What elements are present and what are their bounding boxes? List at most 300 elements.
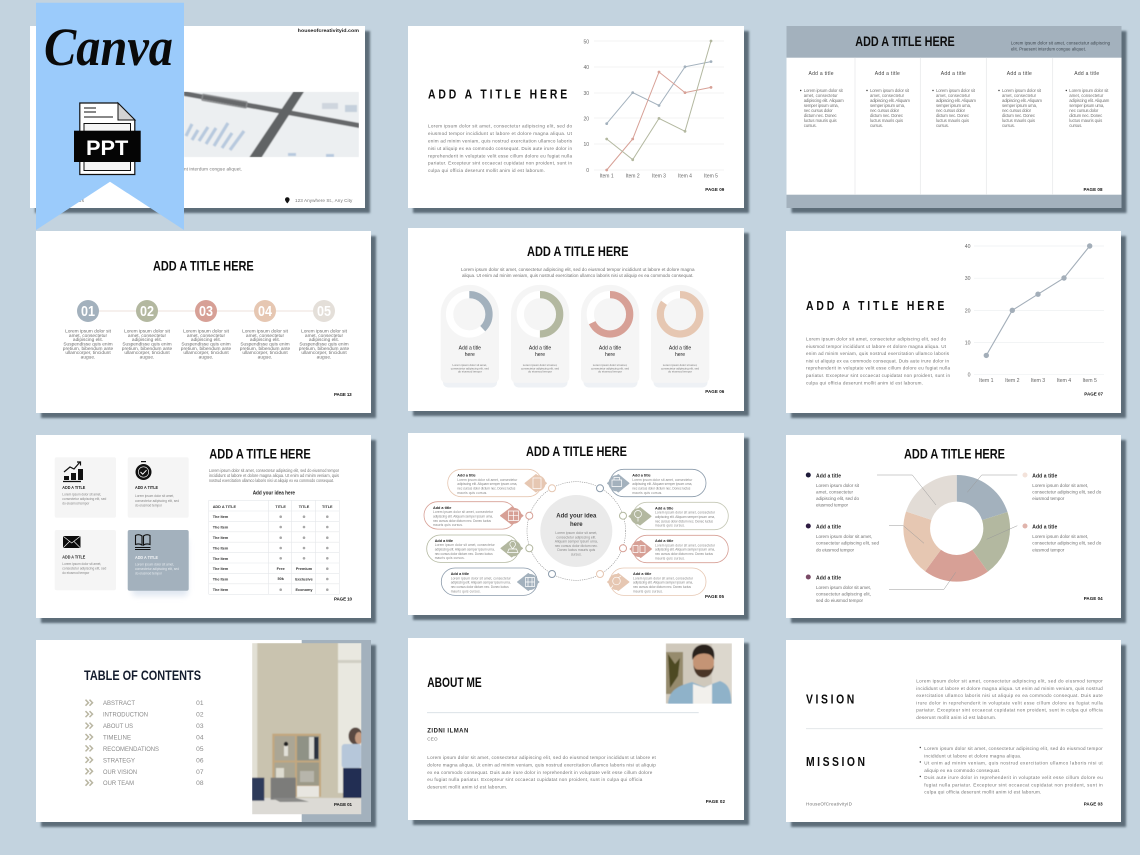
column 1 — [800, 71, 844, 128]
step 03: Suspendisse quis enim — [181, 342, 231, 348]
intro text: Lorem ipsum dolor sit amet, consectetur adipiscing elit, sed do eiusmod tempor — [209, 468, 339, 473]
line chart: 0 — [968, 372, 971, 378]
step 02: adipiscing elit. — [132, 337, 162, 343]
card: stopwatch: Lorem ipsum dolor sit amet, — [135, 494, 174, 498]
column 1: dictum nec. Donec — [804, 113, 838, 118]
column 4: amet, consectetur — [1002, 93, 1037, 98]
step 05: Lorem ipsum dolor sit — [301, 328, 348, 334]
legend: left 1 — [806, 472, 860, 508]
column 1: Add a title — [808, 71, 834, 77]
column 5: Lorem ipsum dolor sit — [1069, 88, 1109, 93]
item: left 4: Add a title — [451, 572, 469, 576]
biography: dolore magna aliqua. Ut enim ad minim veniam, quis nostrud exercitation ullamco laboris nisi ut aliquip — [427, 762, 656, 768]
column 3: adipiscing elit. Aliquam — [936, 98, 976, 103]
item: left 2: nec cursus dolor dictum nec. Donec luctus — [433, 519, 491, 523]
item: left 4: Lorem ipsum dolor sit amet, consectetur — [451, 576, 512, 580]
card 1: do eiusmod tempor — [458, 370, 482, 374]
comparison table — [209, 500, 339, 594]
item: right 1 — [608, 469, 706, 497]
column 3: Lorem ipsum dolor sit — [936, 88, 976, 93]
item: right 4: nec cursus dolor dictum nec. Donec luctus — [633, 585, 691, 589]
card: mail: do eiusmod tempor — [62, 571, 90, 575]
card: growth chart: Lorem ipsum dolor sit amet, — [62, 492, 101, 496]
line chart — [965, 243, 1104, 384]
leader lines — [877, 475, 1017, 589]
contents list: RECOMENDATIONS — [103, 746, 160, 753]
line chart: Item 3 — [652, 174, 666, 180]
ring nodes — [526, 485, 626, 578]
biography: eu fugiat nulla pariatur. Excepteur sint occaecat cupidatat non proident, sunt in culpa qui officia — [427, 777, 643, 782]
legend: left 1: amet, consectetur — [816, 490, 853, 494]
line chart: Item 5 — [1082, 378, 1097, 384]
comparison table: The Item — [213, 557, 229, 561]
page number: PAGE 01 — [334, 802, 352, 807]
card 1: Add a title — [459, 346, 481, 352]
comparison table: The Item — [213, 567, 229, 571]
step 05: Suspendisse quis enim — [299, 342, 349, 348]
legend: right 2: Add a title — [1032, 524, 1058, 530]
page number: PAGE 03 — [1084, 802, 1103, 806]
step 01 — [63, 300, 114, 360]
central hub: Donec luctus mauris quis — [557, 548, 596, 552]
step 03: 03 — [199, 304, 213, 320]
item: left 2: adipiscing elit. Aliquam semper ipsum urna, — [433, 514, 493, 518]
vision text: exercitation ullamco laboris nisi ut aliquip ex ea commodo consequat. Duis aute — [916, 693, 1103, 698]
biography: ex ea commodo consequat. Duis aute irure dolor in reprehenderit in voluptate velit esse cillum dolore — [427, 770, 653, 775]
biography: Lorem ipsum dolor sit amet, consectetur adipiscing elit, sed do eiusmod tempor incididunt ut labore et — [427, 755, 657, 760]
legend: right 1: consectetur adipiscing elit, sed do — [1032, 490, 1102, 494]
step 01: pretium, bibendum ante — [63, 346, 114, 352]
card 4: here — [675, 352, 685, 358]
column 4: semper ipsum urna, — [1002, 103, 1037, 108]
comparison table: The Item — [213, 526, 229, 530]
comparison table: 50k — [278, 577, 285, 581]
column 4: Lorem ipsum dolor sit — [1002, 88, 1042, 93]
item: right 3: Lorem ipsum dolor sit amet, consectetur — [655, 543, 716, 547]
step 02: pretium, bibendum ante — [122, 346, 173, 352]
line chart: Item 2 — [1005, 378, 1020, 384]
column 3: dictum nec. Donec — [936, 113, 970, 118]
line chart: Item 4 — [678, 174, 692, 180]
column 1: cursus. — [804, 123, 817, 128]
legend: left 1: Add a title — [816, 473, 841, 479]
card 2: consectetur adipiscing elit, sed — [521, 366, 559, 370]
mission list — [920, 746, 1103, 794]
slide: multi-line chart page 09 — [408, 26, 749, 213]
contents list: 05 — [196, 746, 204, 753]
item: right 1: adipiscing elit. Aliquam semper ipsum urna, — [632, 482, 692, 486]
line chart: 20 — [583, 116, 589, 122]
intro text: Lorem ipsum dolor sit amet, consectetur adipiscing elit, sed do eiusmod tempor incididunt ut labore et dolore magna — [461, 267, 695, 272]
intro text — [461, 267, 695, 278]
card: stopwatch — [128, 457, 189, 518]
icon: location pin — [285, 197, 290, 203]
icon: PPT file — [74, 103, 141, 174]
column 4: cursus. — [1002, 123, 1015, 128]
item: right 1: mauris quis cursus. — [632, 491, 662, 495]
column 5 — [1066, 71, 1110, 128]
comparison table: Free — [277, 567, 285, 571]
contents list: 06 — [196, 757, 204, 764]
card: stopwatch: ADD A TITLE — [135, 485, 158, 490]
address: 123 Anywhere St., Any City — [295, 198, 353, 203]
card 4: Lorem ipsum dolor sit amet, — [663, 363, 697, 367]
comparison table: The Item — [213, 578, 229, 582]
column 2: cursus. — [870, 123, 883, 128]
icon: stopwatch — [136, 461, 152, 480]
item: right 1: Add a title — [632, 474, 651, 478]
card: book highlighted: ADD A TITLE — [135, 555, 158, 560]
contents list: ABOUT US — [103, 723, 134, 730]
legend: left 2: consectetur adipiscing elit, sed — [816, 541, 879, 546]
column 5: nec cursus dolor — [1069, 108, 1099, 113]
line chart: 0 — [586, 168, 589, 174]
step 03 — [181, 300, 232, 360]
item: left 4: mauris quis cursus. — [451, 589, 481, 593]
item: left 3: nec cursus dolor dictum nec. Donec luctus — [435, 552, 493, 556]
card: stopwatch: consectetur adipiscing elit, sed — [135, 499, 179, 503]
item: left 2: Add a title — [433, 506, 451, 510]
step 01: amet, consectetur — [69, 333, 107, 339]
paragraph: reprehenderit in voluptate velit esse cillum dolore eu fugiat nulla — [428, 154, 572, 158]
paragraph: pariatur. Excepteur sint occaecat cupidatat non proident, sunt in — [428, 160, 572, 166]
item: right 2: Add a title — [655, 506, 673, 510]
central hub: consectetur adipiscing elit. — [556, 535, 596, 539]
item: left 4: adipiscing elit. Aliquam semper ipsum urna, — [451, 581, 511, 585]
intro text: incididunt ut labore et dolore magna aliqua. Ut enim ad minim veniam, quis — [209, 473, 340, 478]
central hub: Aliquam semper ipsum urna, — [555, 540, 598, 544]
donut chart — [917, 488, 997, 568]
step 03: Lorem ipsum dolor sit — [183, 328, 230, 334]
cover subtitle: nt interdum congue aliquet. — [184, 166, 242, 172]
card 3: consectetur adipiscing elit, sed — [591, 366, 629, 370]
card: stopwatch: do eiusmod tempor — [135, 504, 163, 508]
column 5: Add a title — [1074, 71, 1099, 77]
line chart — [583, 40, 724, 180]
mission list: aliquip ex ea commodo consequat. — [924, 768, 1000, 773]
ribbon badge: Canva PPT — [36, 3, 184, 230]
comparison table: The Item — [213, 515, 229, 519]
heading: ADD A TITLE HERE — [526, 443, 627, 459]
step 02: amet, consectetur — [128, 333, 166, 339]
legend: right 1: Lorem ipsum dolor sit amet, — [1032, 483, 1088, 488]
paragraph: nisi ut aliquip ex ea commodo consequat. Duis aute irure dolor in — [428, 146, 572, 151]
line chart: 30 — [583, 91, 589, 97]
column 4: nec cursus dolor — [1002, 108, 1032, 113]
contents list: OUR TEAM — [103, 780, 134, 787]
step 04: amet, consectetur — [246, 333, 284, 339]
page number: PAGE 08 — [1084, 187, 1103, 192]
column 3 — [932, 71, 976, 128]
column 2 — [866, 71, 910, 128]
comparison table: TITLE — [275, 505, 286, 509]
item: right 4: adipiscing elit. Aliquam semper ipsum urna, — [633, 581, 693, 585]
column 4: adipiscing elit. Aliquam — [1002, 98, 1042, 103]
line chart: 30 — [965, 276, 971, 282]
step 01: Lorem ipsum dolor sit — [65, 328, 112, 334]
card: book highlighted: consectetur adipiscing elit, sed — [135, 567, 179, 571]
column 5: luctus mauris quis — [1069, 118, 1102, 123]
paragraph: enim ad minim veniam, quis nostrud exercitation ullamco laboris — [428, 138, 573, 144]
item: left 3: Add a title — [435, 539, 453, 543]
portrait photo — [666, 643, 732, 704]
legend: right 2: consectetur adipiscing elit, sed do — [1032, 541, 1102, 546]
line chart: Item 1 — [979, 378, 994, 384]
paragraph — [806, 336, 950, 385]
icon: envelope — [63, 536, 80, 548]
contents list: OUR VISION — [103, 769, 137, 776]
card 2: here — [535, 352, 545, 358]
mission list: Duis aute irure dolor in reprehenderit in voluptate velit esse cillum dolore eu — [924, 775, 1103, 780]
mission list: fugiat nulla pariatur. Excepteur sint occaecat cupidatat non proident, sunt in — [924, 782, 1103, 787]
column 2: nec cursus dolor — [870, 108, 900, 113]
item: left 3: mauris quis cursus. — [435, 556, 465, 560]
step 03: ullamcorper, tincidunt — [183, 350, 229, 356]
biography: deserunt mollit anim id est laborum. — [427, 784, 507, 790]
item: right 2 — [629, 502, 728, 530]
column 2: Lorem ipsum dolor sit — [870, 88, 910, 93]
intro text: aliqua. Ut enim ad minim veniam, quis nostrud exercitation ullamco laboris nisi ut aliquip ex ea commodo consequat. — [462, 273, 694, 278]
legend: right 2 — [1022, 524, 1102, 552]
slide: donut chart page 04 — [786, 435, 1126, 623]
step 01: 01 — [81, 304, 95, 320]
contents list: 08 — [196, 780, 204, 787]
step 02: Lorem ipsum dolor sit — [124, 328, 171, 334]
legend: right 2: eiusmod tempor — [1032, 547, 1065, 552]
step 04: Lorem ipsum dolor sit — [242, 328, 289, 334]
step 03: adipiscing elit. — [191, 337, 221, 343]
contact fragment: ess — [76, 198, 85, 203]
step 04: 04 — [258, 304, 272, 320]
footer band — [786, 195, 1122, 208]
card 1 — [441, 285, 499, 388]
item: right 2: Lorem ipsum dolor sit amet, consectetur — [655, 510, 716, 514]
column 3: amet, consectetur — [936, 93, 971, 98]
central hub: Lorem ipsum dolor sit amet, — [555, 531, 597, 535]
paragraph: Lorem ipsum dolor sit amet, consectetur adipiscing elit, sed do — [806, 336, 946, 342]
column 3: luctus mauris quis — [936, 118, 969, 123]
card 3: Add a title — [599, 346, 621, 352]
slide: radial idea diagram page 05 — [408, 433, 749, 620]
header band — [786, 26, 1122, 58]
vision text: pariatur. Excepteur sint occaecat cupidatat non proident, sunt in culpa qui officia — [916, 708, 1103, 713]
item: right 3: mauris quis cursus. — [655, 556, 685, 560]
item: left 1: Lorem ipsum dolor sit amet, consectetur — [457, 478, 518, 482]
card: book highlighted: do eiusmod tempor — [135, 572, 163, 576]
card: mail: consectetur adipiscing elit, sed — [62, 567, 107, 571]
step 05: adipiscing elit. — [309, 337, 339, 343]
card: mail: Lorem ipsum dolor sit amet, — [62, 562, 101, 566]
step 04 — [240, 300, 291, 360]
slide: vision and mission page 03 — [786, 640, 1126, 827]
item: right 2: adipiscing elit. Aliquam semper ipsum urna, — [655, 515, 715, 519]
page number: PAGE 13 — [334, 392, 352, 397]
office photo — [252, 643, 363, 815]
icon: open book — [135, 535, 150, 550]
slide: table of contents page 01 — [36, 640, 376, 827]
card 2 — [511, 285, 569, 388]
column 5: semper ipsum urna, — [1069, 103, 1104, 108]
legend: left 1: adipiscing elit, sed do — [816, 496, 859, 501]
legend: left 3: Add a title — [816, 575, 841, 581]
line chart: 20 — [965, 308, 971, 314]
central hub: Add your idea — [556, 514, 597, 520]
column 5: amet, consectetur — [1069, 93, 1104, 98]
comparison table: Exclusive — [295, 578, 313, 582]
central hub: cursus. — [571, 552, 582, 556]
card: growth chart — [55, 457, 116, 518]
slide: cover page — [30, 26, 370, 213]
brand name: HouseOfCreativityID — [806, 802, 853, 806]
card: mail — [55, 530, 116, 590]
step 01: Suspendisse quis enim — [63, 342, 113, 348]
legend: left 2: Add a title — [816, 524, 841, 530]
card: book highlighted — [128, 530, 189, 596]
paragraph: culpa qui officia deserunt mollit anim id est laborum. — [428, 168, 545, 173]
step 01: ullamcorper, tincidunt — [65, 350, 111, 356]
page number: PAGE 09 — [705, 187, 725, 192]
heading: ADD A TITLE HERE — [904, 445, 1005, 461]
item: right 3: nec cursus dolor dictum nec. Donec luctus — [655, 552, 713, 556]
contents list: 04 — [196, 734, 204, 742]
vision text: deserunt mollit anim id est laborum. — [916, 715, 996, 720]
column 5: dictum nec. Donec — [1069, 113, 1103, 118]
step 02: ullamcorper, tincidunt — [124, 350, 170, 356]
legend: left 2: Lorem ipsum dolor sit amet, — [816, 534, 872, 539]
contents list: INTRODUCTION — [103, 712, 148, 719]
step 02 — [122, 300, 173, 360]
step 02: 02 — [140, 304, 154, 320]
comparison table: Economy — [295, 588, 313, 592]
item: right 4 — [608, 568, 706, 595]
legend: left 2: do eiusmod tempor — [816, 547, 854, 552]
mission list: Ut enim ad minim veniam, quis nostrud exercitation ullamco laboris nisi ut — [924, 760, 1103, 766]
line chart: 40 — [965, 244, 971, 250]
legend: left 2 — [806, 524, 879, 552]
column 4: Add a title — [1007, 71, 1032, 77]
vision text: Lorem ipsum dolor sit amet, consectetur adipiscing elit, sed do eiusmod tempor — [916, 678, 1103, 684]
line chart: Item 2 — [626, 174, 640, 180]
column 1: semper ipsum urna, — [804, 103, 839, 108]
heading: ADD A TITLE HERE — [527, 243, 628, 259]
page number: PAGE 05 — [705, 594, 724, 599]
item: left 3: adipiscing elit. Aliquam semper ipsum urna, — [435, 548, 495, 552]
column 4: luctus mauris quis — [1002, 118, 1035, 123]
contents list: TIMELINE — [103, 734, 132, 742]
mission heading: MISSION — [806, 755, 865, 769]
step 03: amet, consectetur — [187, 333, 225, 339]
paragraph: Lorem ipsum dolor sit amet, consectetur adipiscing elit, sed do — [428, 124, 572, 128]
biography — [427, 755, 657, 790]
slide: five columns page 08 — [786, 26, 1126, 213]
central hub — [527, 482, 626, 580]
paragraph: eiusmod tempor incididunt ut labore et dolore magna aliqua. Ut — [806, 344, 947, 349]
item: left 1: mauris quis cursus. — [457, 491, 487, 495]
heading: ADD A TITLE HERE — [153, 257, 254, 273]
intro text: nostrud exercitation ullamco laboris nisi ut aliquip ex ea commodo consequat. — [209, 478, 334, 483]
column 4 — [998, 71, 1042, 128]
item: right 1: nec cursus dolor dictum nec. Donec luctus — [632, 486, 691, 490]
website url: houseofcreativityid.com — [298, 28, 359, 33]
column 1: amet, consectetur — [804, 93, 838, 98]
item: left 2 — [424, 502, 523, 529]
heading: TABLE OF CONTENTS — [84, 667, 201, 683]
item: right 2: nec cursus dolor dictum nec. Donec luctus — [655, 519, 713, 523]
vision text — [916, 678, 1103, 720]
item: left 4 — [441, 568, 539, 595]
icon: PPT file: PPT — [86, 137, 128, 160]
column 1: Lorem ipsum dolor sit — [804, 88, 843, 93]
legend: left 3 — [806, 574, 871, 603]
header note — [1011, 40, 1111, 52]
legend: right 2: Lorem ipsum dolor sit amet, — [1032, 534, 1088, 539]
card: book highlighted: Lorem ipsum dolor sit amet, — [135, 562, 174, 566]
cover photo: clipboard and charts — [184, 91, 359, 157]
contents list: 07 — [196, 769, 204, 776]
column 2: adipiscing elit. Aliquam — [870, 98, 910, 103]
slide: about me page 02 — [408, 638, 749, 825]
card 4: consectetur adipiscing elit, sed — [661, 366, 699, 370]
mission list: Lorem ipsum dolor sit amet, consectetur adipiscing elit, sed do eiusmod tempor — [924, 746, 1103, 751]
column 2: dictum nec. Donec — [870, 113, 904, 118]
line chart: Item 3 — [1031, 378, 1045, 384]
contents list: 01 — [196, 700, 204, 707]
page number: PAGE 07 — [1084, 392, 1103, 397]
mission list: culpa qui officia deserunt mollit anim id est laborum. — [924, 790, 1041, 794]
heading: ADD A TITLE HERE — [209, 446, 311, 462]
contents list: ABSTRACT — [103, 700, 135, 707]
paragraph: nisi ut aliquip ex ea commodo consequat. Duis aute irure dolor in — [806, 358, 949, 364]
legend: left 3: consectetur adipiscing elit, — [816, 592, 871, 597]
item: right 2: mauris quis cursus. — [655, 524, 685, 528]
step 02: augue. — [140, 356, 154, 360]
step 05: 05 — [317, 304, 331, 320]
column 5: cursus. — [1069, 123, 1082, 128]
table caption: Add your idea here — [253, 490, 295, 496]
card: growth chart: consectetur adipiscing elit, sed — [62, 497, 107, 501]
line chart: Item 4 — [1057, 378, 1071, 384]
item: left 3 — [427, 535, 522, 562]
line chart: Item 1 — [600, 174, 614, 180]
step 05: augue. — [317, 356, 331, 360]
column 3: nec cursus dolor — [936, 108, 966, 113]
item: right 4: Lorem ipsum dolor sit amet, consectetur — [633, 576, 694, 580]
central hub: here — [570, 522, 583, 528]
slide: timeline page 13 — [36, 231, 376, 418]
card 4: Add a title — [669, 346, 691, 352]
column 2: Add a title — [875, 71, 900, 77]
heading: ADD A TITLE HERE — [428, 87, 567, 102]
line chart: 50 — [583, 40, 589, 46]
slide: single line chart page 07 — [786, 231, 1126, 418]
paragraph: culpa qui officia deserunt mollit anim id est laborum. — [806, 380, 923, 385]
card 3 — [581, 285, 639, 388]
legend: left 3: Lorem ipsum dolor sit amet, — [816, 585, 871, 590]
heading: ADD A TITLE HERE — [806, 299, 944, 313]
legend: right 1 — [1022, 472, 1102, 501]
heading: ADD A TITLE HERE — [855, 33, 955, 49]
paragraph: eiusmod tempor incididunt ut labore et dolore magna aliqua. Ut — [428, 131, 573, 136]
Canva wordmark: Canva — [44, 17, 173, 77]
step 05: ullamcorper, tincidunt — [301, 350, 347, 356]
legend: left 1: Lorem ipsum dolor sit — [816, 483, 860, 488]
central hub: nec cursus dolor dictum nec. — [555, 544, 598, 548]
item: right 1: Lorem ipsum dolor sit amet, consectetur — [632, 478, 693, 482]
card 1: here — [465, 352, 475, 358]
paragraph: enim ad minim veniam, quis nostrud exercitation ullamco laboris — [806, 351, 950, 356]
column 1: luctus mauris quis — [804, 118, 837, 123]
column 2: luctus mauris quis — [870, 118, 903, 123]
